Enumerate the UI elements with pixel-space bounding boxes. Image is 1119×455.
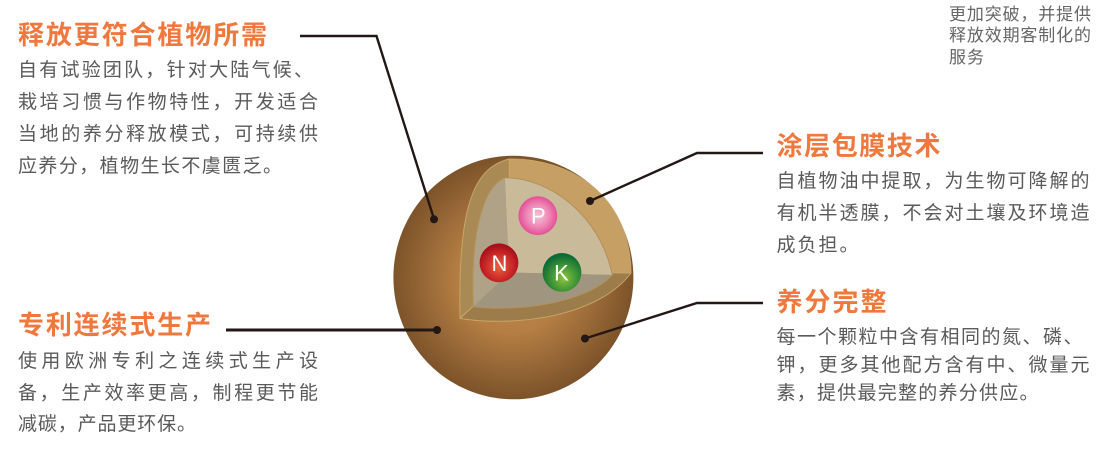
heading: coating technology: 涂层包膜技术 [776, 131, 940, 161]
text: coating technology body [776, 170, 1090, 256]
block: complete nutrition [776, 287, 1090, 404]
text: release pattern body: 当地的养分释放模式，可持续供 [18, 123, 318, 145]
sphere body [393, 156, 633, 399]
sphere: fertilizer granule cutaway [393, 156, 633, 399]
text: patented production body: 减碳，产品更环保。 [18, 413, 196, 435]
text: customised service note [949, 5, 1091, 67]
text: release pattern body [18, 59, 318, 177]
nutrient ball K [543, 253, 581, 292]
text: patented production body: 备，生产效率更高，制程更节能 [18, 382, 318, 404]
text: complete nutrition body: 每一个颗粒中含有相同的氮、磷、 [776, 326, 1082, 348]
heading: patented production: 专利连续式生产 [18, 310, 211, 340]
text: coating technology body: 有机半透膜，不会对土壤及环境造 [776, 202, 1090, 224]
text: complete nutrition body [776, 326, 1090, 404]
text: coating technology body: 成负担。 [776, 234, 858, 256]
text: release pattern body: 应养分，植物生长不虞匮乏。 [18, 155, 282, 177]
block: coating technology [776, 131, 1090, 256]
leader line: complete nutrition [581, 303, 763, 342]
leader line: coating technology [586, 153, 763, 205]
nutrient ball N [480, 243, 518, 282]
leader line: patented production [226, 326, 441, 334]
block: release pattern [18, 20, 318, 177]
text: customised service note: 更加突破，并提供 [949, 5, 1091, 24]
coating layer cutaway [460, 159, 631, 321]
text: customised service note: 释放效期客制化的 [949, 26, 1091, 45]
text: patented production body [18, 350, 318, 435]
text: customised service note: 服务 [949, 48, 984, 67]
text: release pattern body: 自有试验团队，针对大陆气候、 [18, 59, 313, 81]
leader line: release pattern [300, 36, 438, 223]
heading: complete nutrition: 养分完整 [776, 287, 886, 317]
nutrient ball P [518, 196, 557, 235]
nutrient ball N: N [492, 251, 507, 276]
text: complete nutrition body: 素，提供最完整的养分供应。 [776, 382, 1038, 404]
text: patented production body: 使用欧洲专利之连续式生产设 [18, 350, 318, 372]
nutrient ball K: K [554, 260, 569, 286]
text: coating technology body: 自植物油中提取，为生物可降解的 [776, 170, 1090, 192]
inner core cutaway [473, 178, 612, 308]
text: complete nutrition body: 钾，更多其他配方含有中、微量元 [776, 354, 1090, 376]
block: patented production [18, 310, 318, 435]
nutrient ball P: P [531, 204, 546, 228]
heading: release pattern: 释放更符合植物所需 [18, 20, 267, 50]
text: release pattern body: 栽培习惯与作物特性，开发适合 [18, 91, 318, 113]
